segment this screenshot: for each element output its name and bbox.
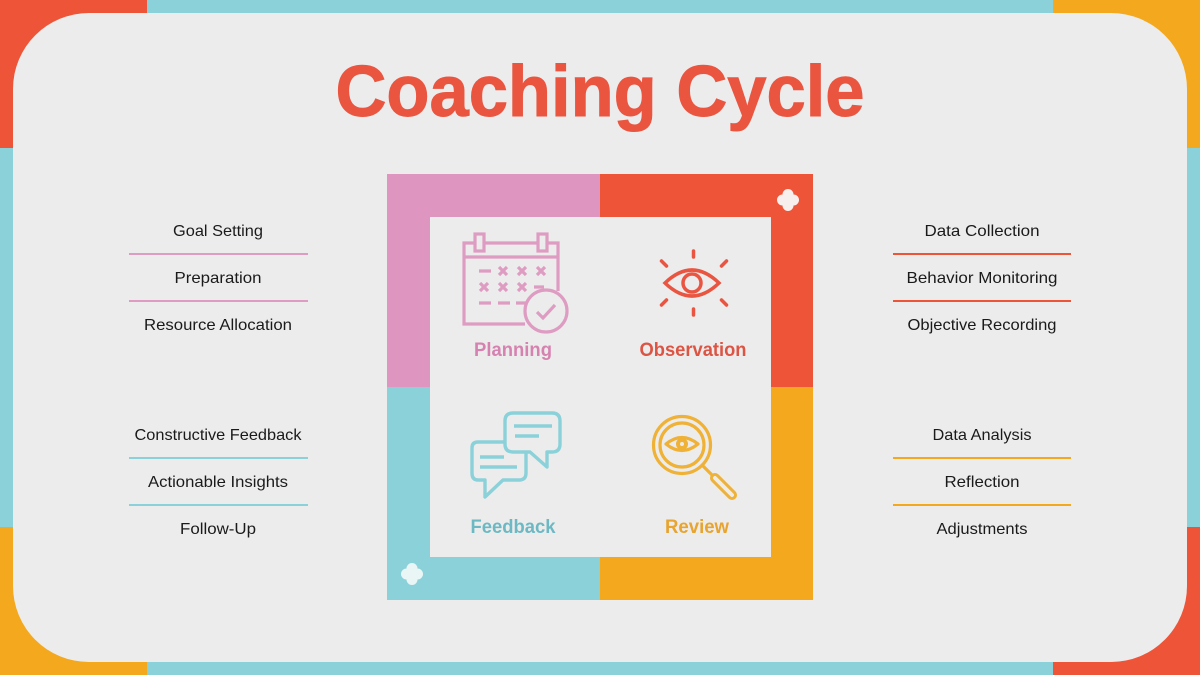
label: Feedback: Feedback: [470, 516, 556, 538]
icon: eye with rays: [662, 251, 726, 315]
list: Planning details: Preparation: [174, 270, 262, 287]
icon: magnifier with eye: [654, 416, 732, 495]
label: Planning: Planning: [474, 339, 552, 361]
label: Review: Review: [665, 516, 730, 538]
list: Planning details: Goal Setting: [173, 223, 263, 240]
list: Observation details: Behavior Monitoring: [906, 270, 1058, 287]
list: Feedback details: [129, 427, 308, 538]
list: Observation details: [893, 223, 1071, 334]
list: Planning details: Resource Allocation: [144, 317, 292, 334]
list: Observation details: Data Collection: [924, 223, 1040, 240]
list: Observation details: Objective Recording: [908, 317, 1056, 334]
list: Feedback details: Actionable Insights: [148, 474, 288, 491]
label: Observation: Observation: [640, 339, 746, 361]
icon: speech bubbles: [472, 413, 560, 497]
central cycle square: [387, 174, 813, 600]
list: Review details: [893, 427, 1071, 538]
list: Review details: Adjustments: [936, 521, 1028, 538]
icon: calendar with check: [464, 234, 567, 332]
icon: clover top right: [777, 189, 799, 211]
icon: clover bottom left: [401, 563, 423, 585]
list: Feedback details: Constructive Feedback: [134, 427, 303, 444]
list: Feedback details: Follow-Up: [180, 521, 256, 538]
list: Review details: Reflection: [944, 474, 1020, 491]
list: Review details: Data Analysis: [932, 427, 1032, 444]
title: Coaching Cycle: [336, 52, 864, 132]
list: Planning details: [129, 223, 308, 334]
